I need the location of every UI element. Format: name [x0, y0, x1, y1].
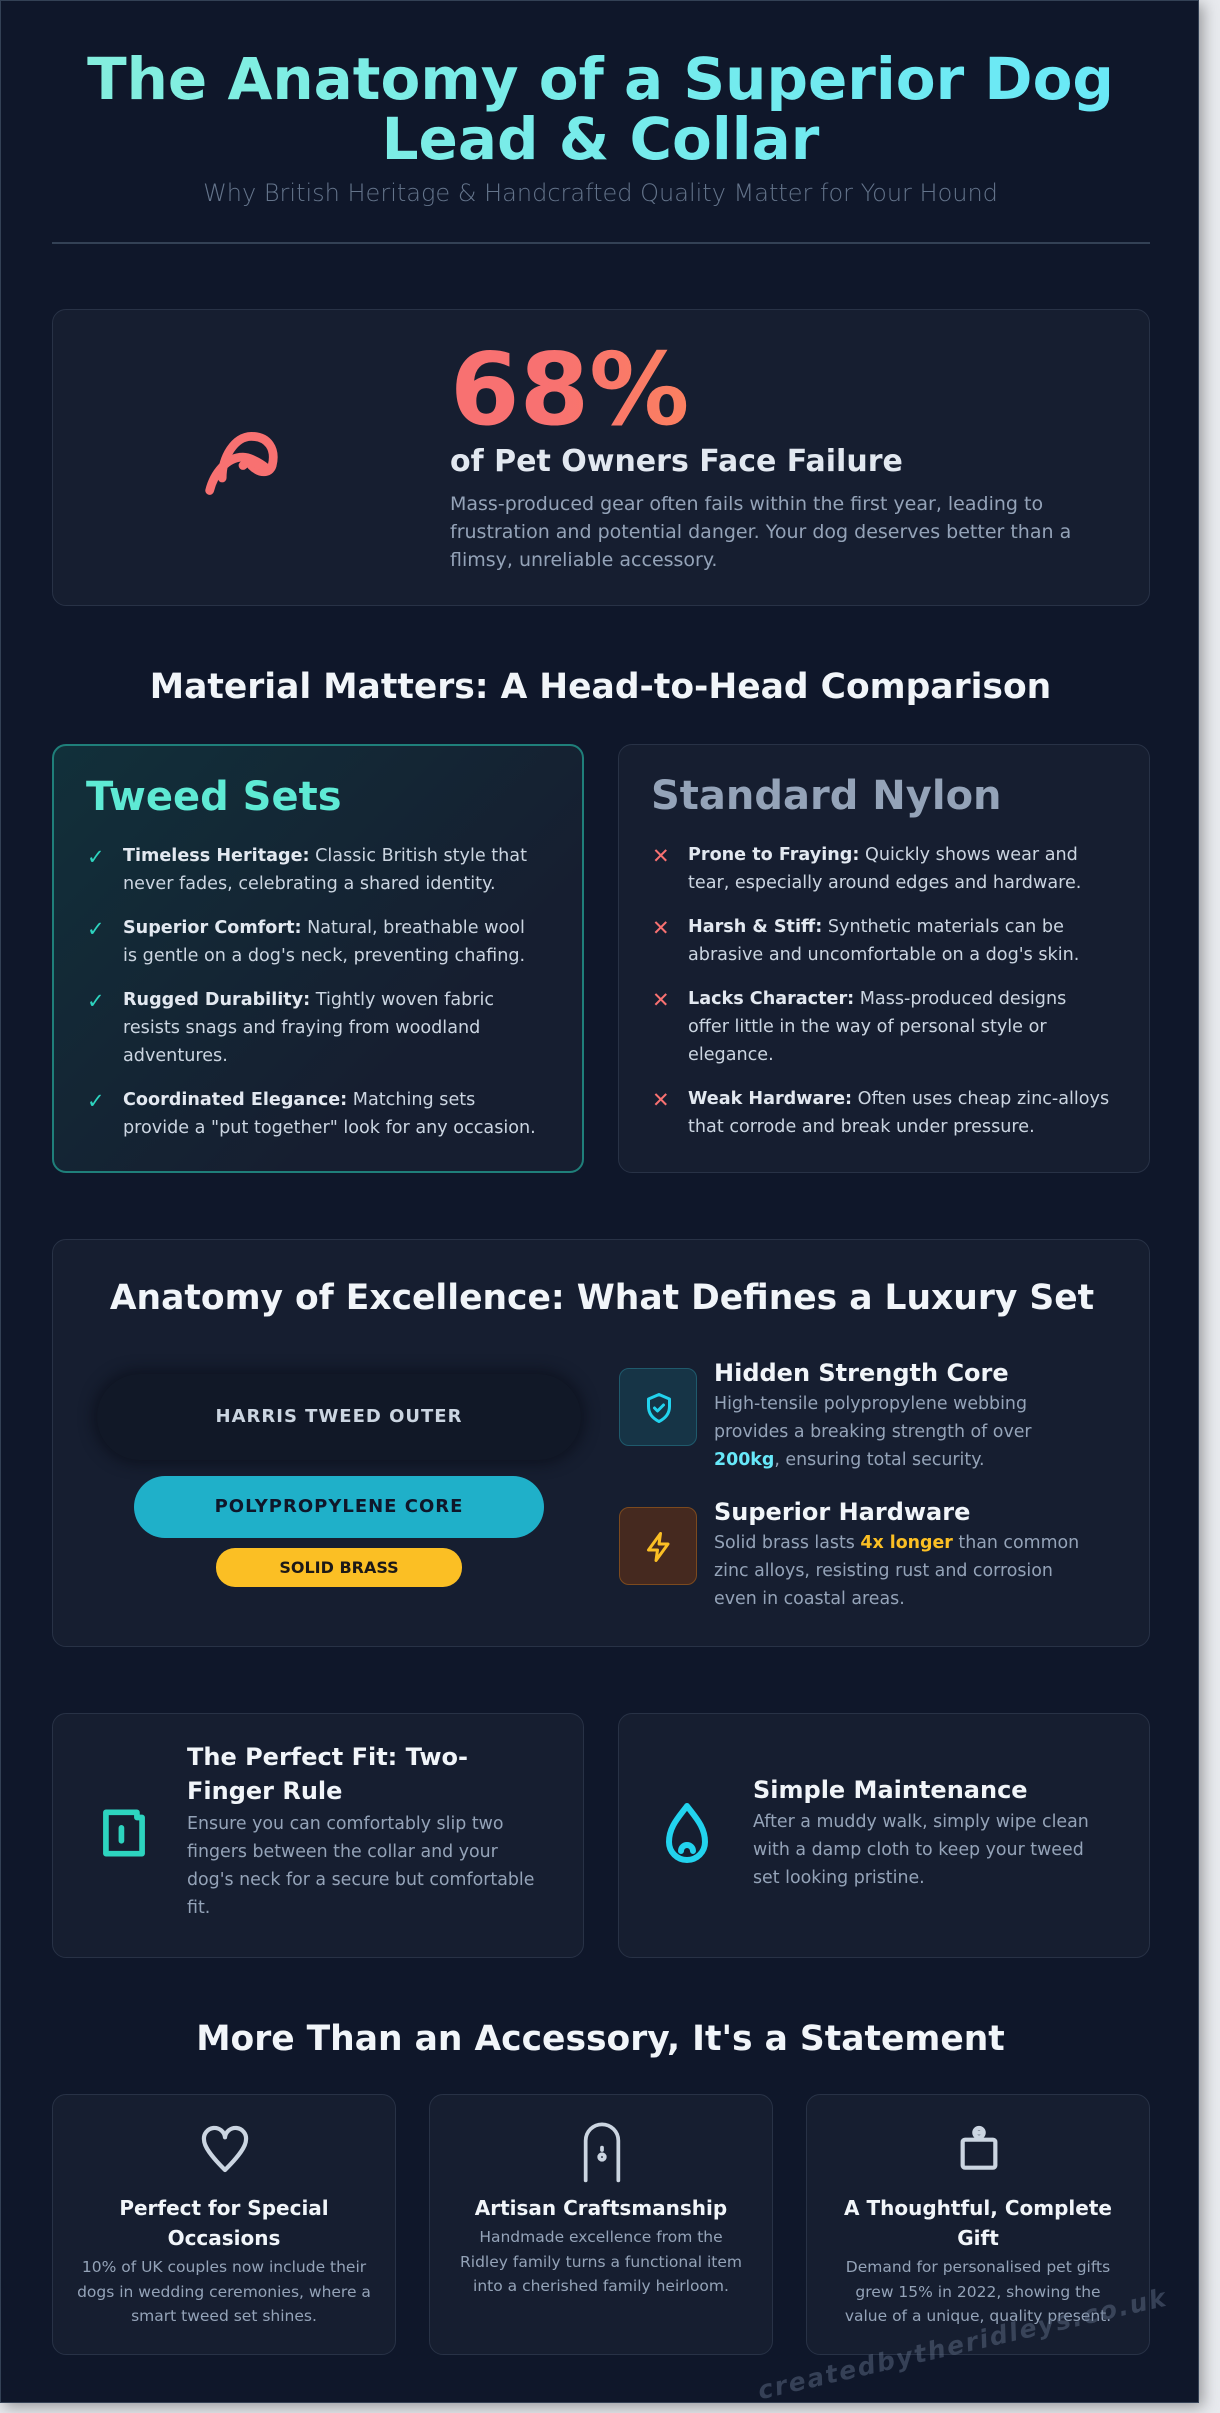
- layer: polypropylene core: [134, 1476, 544, 1538]
- nylon list: [652, 844, 1109, 1137]
- panel: perfect fit: [52, 1713, 584, 1958]
- panel: artisan craftsmanship: [429, 2094, 773, 2355]
- tweed list: ✓: [87, 989, 105, 1013]
- panel: special occasions: [52, 2094, 396, 2355]
- nylon list: Harsh & Stiff: Synthetic materials can be abrasive and uncomfortable on a dog's skin.: [688, 917, 1079, 965]
- title: The Anatomy of a Superior Dog: [87, 45, 1114, 113]
- icon: arch: [584, 2122, 620, 2182]
- nylon list: ✕: [652, 1088, 670, 1112]
- panel: anatomy of excellence: [52, 1239, 1150, 1647]
- title: Lead & Collar: [382, 105, 819, 173]
- diagram: layers: [92, 1369, 586, 1587]
- panel: artisan craftsmanship: Handmade excellence from the Ridley family turns a functional item into a cherished family heirloom.: [460, 2228, 742, 2295]
- title: [1, 49, 1200, 169]
- layer: tweed outer: HARRIS TWEED OUTER: [216, 1406, 462, 1427]
- icon: collar tag: [103, 1810, 145, 1856]
- panel: simple maintenance: After a muddy walk, simply wipe clean with a damp cloth to keep your tweed set looking pristine.: [753, 1812, 1089, 1888]
- feature: hidden strength core: High-tensile polypropylene webbing provides a breaking strength of over 200kg, ensuring total security.: [714, 1394, 1032, 1470]
- feature: superior hardware: [619, 1498, 1079, 1609]
- nylon list: Prone to Fraying: Quickly shows wear and tear, especially around edges and hardware.: [688, 845, 1081, 893]
- feature: hidden strength core: Hidden Strength Core: [714, 1359, 1009, 1387]
- icon: broken lead: [205, 432, 278, 495]
- tweed list: Rugged Durability: Tightly woven fabric resists snags and fraying from woodland adventures.: [123, 990, 494, 1066]
- panel: perfect fit: The Perfect Fit: Two-Finger Rule: [187, 1743, 468, 1805]
- stat number: 68%: [450, 331, 689, 448]
- nylon list: Weak Hardware: Often uses cheap zinc-alloys that corrode and break under pressure.: [688, 1089, 1109, 1137]
- panel: thoughtful gift: Demand for personalised pet gifts grew 15% in 2022, showing the value of a unique, quality present.: [845, 2258, 1111, 2325]
- heading: statement: More Than an Accessory, It's a Statement: [196, 2019, 1005, 2059]
- panel: simple maintenance: [618, 1713, 1150, 1958]
- icon: shield: [619, 1368, 697, 1446]
- tweed list: ✓: [87, 845, 105, 869]
- panel: special occasions: Perfect for Special Occasions: [119, 2196, 329, 2250]
- tweed list: Timeless Heritage: Classic British style that never fades, celebrating a shared identity.: [123, 846, 527, 894]
- feature: hidden strength core: [619, 1359, 1032, 1470]
- nylon list: Lacks Character: Mass-produced designs: [688, 989, 1066, 1009]
- nylon list: ✕: [652, 916, 670, 940]
- tweed list: ✓: [87, 917, 105, 941]
- feature: superior hardware: Superior Hardware: [714, 1498, 970, 1526]
- nylon list: ✕: [652, 988, 670, 1012]
- panel: stat card: [52, 309, 1150, 606]
- icon: bolt: [619, 1507, 697, 1585]
- anatomy heading: Anatomy of Excellence: What Defines a Luxury Set: [110, 1278, 1094, 1318]
- subtitle: Why British Heritage & Handcrafted Quality Matter for Your Hound: [203, 179, 998, 207]
- nylon list: ✕: [652, 844, 670, 868]
- layer: tweed outer: [97, 1374, 581, 1460]
- tweed heading: Tweed Sets: [86, 774, 342, 820]
- feature: superior hardware: Solid brass lasts 4x longer than common zinc alloys, resisting rust and corrosion even in coastal areas.: [714, 1533, 1079, 1609]
- nylon list: offer little in the way of personal style or elegance.: [688, 1017, 1047, 1065]
- panel: thoughtful gift: [806, 2094, 1150, 2355]
- icon: heart: [202, 2126, 248, 2172]
- panel: standard nylon: [618, 744, 1150, 1173]
- layer: polypropylene core: POLYPROPYLENE CORE: [215, 1496, 463, 1517]
- layer: solid brass: SOLID BRASS: [279, 1558, 399, 1577]
- icon: gift box: [960, 2126, 998, 2170]
- icon: water drop: [666, 1803, 708, 1863]
- panel: simple maintenance: Simple Maintenance: [753, 1776, 1028, 1804]
- tweed list: Superior Comfort: Natural, breathable wool is gentle on a dog's neck, preventing chafing.: [123, 918, 525, 966]
- layer: solid brass: [216, 1548, 462, 1587]
- tweed list: [87, 845, 536, 1138]
- panel: thoughtful gift: A Thoughtful, Complete Gift: [844, 2196, 1112, 2250]
- panel: artisan craftsmanship: Artisan Craftsmanship: [475, 2196, 727, 2220]
- panel: tweed sets: [52, 744, 584, 1173]
- panel: perfect fit: Ensure you can comfortably slip two fingers between the collar and your dog's neck for a secure but comfortable fit.: [187, 1814, 534, 1918]
- nylon heading: Standard Nylon: [651, 773, 1002, 819]
- heading: material matters: Material Matters: A Head-to-Head Comparison: [150, 667, 1051, 707]
- panel: special occasions: 10% of UK couples now include their dogs in wedding ceremonies, where a smart tweed set shines.: [77, 2258, 371, 2325]
- tweed list: ✓: [87, 1089, 105, 1113]
- tweed list: Coordinated Elegance: Matching sets provide a "put together" look for any occasion.: [123, 1090, 536, 1138]
- stat text: Mass-produced gear often fails within the first year, leading to frustration and potential danger. Your dog deserves better than a flimsy, unreliable accessory.: [450, 493, 1071, 571]
- watermark: createdbytheridleys.co.uk: [755, 2283, 1170, 2403]
- stat heading: of Pet Owners Face Failure: [450, 444, 903, 479]
